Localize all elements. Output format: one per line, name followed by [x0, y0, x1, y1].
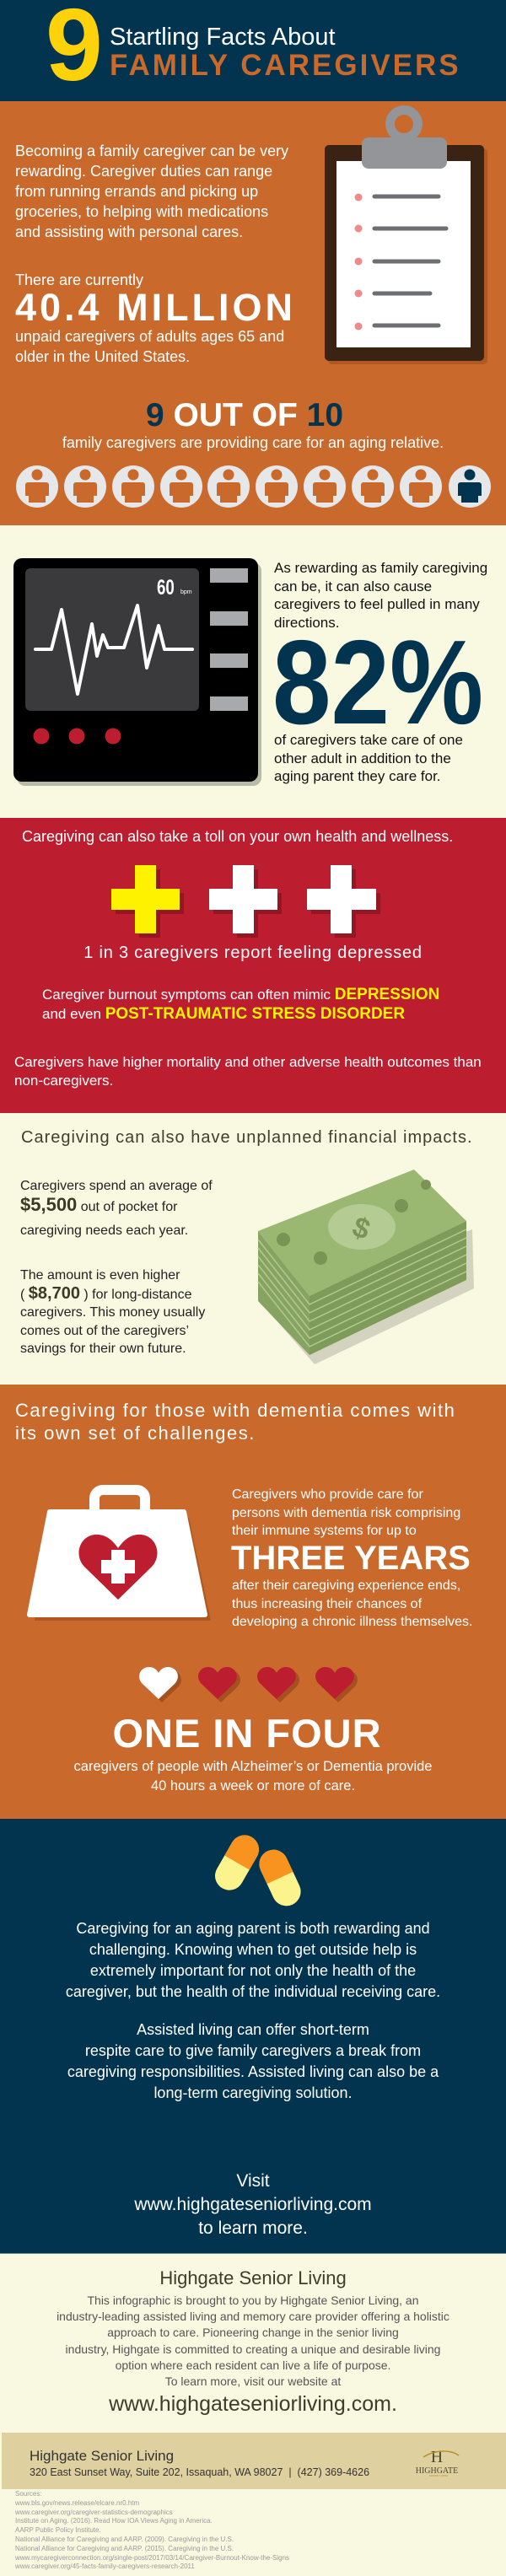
heading: dementia [15, 1400, 455, 1444]
text: three years [232, 1487, 460, 1538]
text: pulled in many directions: can be, it can also cause [274, 578, 432, 594]
text: aging relative: family caregivers are providing care for an aging relative. [62, 434, 444, 451]
text: visit website: to learn more. [198, 2218, 308, 2238]
text: sources: Sources: [15, 2490, 42, 2498]
text block: intro: and assisting with personal cares. [15, 223, 243, 240]
panel: health toll [0, 818, 506, 1113]
text: visit website [134, 2171, 372, 2238]
stat: one in four: ONE IN FOUR [112, 1711, 382, 1756]
text: $5,500 [20, 1179, 213, 1238]
text: after caregiving [232, 1578, 472, 1629]
text: about paragraph: approach to care. Pioneering change in the senior living [107, 2326, 399, 2339]
icon: Highgate logo: H [431, 2448, 443, 2466]
text: conclusion paragraph 2 [67, 2021, 439, 2101]
text: after caregiving: developing a chronic illness themselves. [232, 1615, 472, 1629]
icon: pills [215, 1835, 301, 1906]
text: 1 in 3 depressed: 1 in 3 caregivers report feeling depressed [83, 944, 423, 962]
text: about paragraph: industry, Highgate is committed to creating a unique and desirable living [66, 2342, 440, 2356]
text: one in four caption [74, 1759, 432, 1794]
stat: 40.4 million: unpaid caregivers of adults ages 65 and [15, 328, 284, 345]
text: about paragraph [57, 2294, 449, 2388]
text: $8,700 [20, 1268, 206, 1356]
text: three years: Caregivers who provide care for [232, 1487, 423, 1502]
text: pulled in many directions: directions. [274, 614, 339, 631]
text: conclusion paragraph 2: caregiving responsibilities. Assisted living can also be a [67, 2063, 439, 2080]
text: pulled in many directions: As rewarding as family caregiving [274, 560, 487, 576]
icon: medical bag [27, 1485, 211, 1621]
stat: three years: THREE YEARS [231, 1540, 471, 1577]
text: sources: Institute on Aging. (2016). Read How IOA Views Aging in America. [15, 2517, 213, 2525]
text: $5,500: $5,500 out of pocket for [20, 1194, 177, 1215]
text: after caregiving: thus increasing their chances of [232, 1597, 422, 1611]
icon row: 10 people [16, 465, 491, 508]
text block: intro: Becoming a family caregiver can be very [15, 143, 288, 159]
heading: financial: Caregiving can also have unplanned financial impacts. [21, 1128, 473, 1147]
text block: intro: from running errands and picking up [15, 183, 258, 200]
icon: Highgate logo: SENIOR LIVING [429, 2474, 449, 2477]
text: about paragraph: To learn more, visit our website at [165, 2374, 341, 2388]
text: $8,700: comes out of the caregivers’ [20, 1324, 189, 1337]
text: $5,500: Caregivers spend an average of [20, 1179, 213, 1193]
text: sources: www.bls.gov/news.release/elcare.nr0.htm [15, 2499, 139, 2507]
text: burnout [42, 986, 439, 1023]
text: about paragraph: industry-leading assisted living and memory care provider offering a holistic [57, 2310, 449, 2323]
text: conclusion paragraph 1: challenging. Knowing when to get outside help is [89, 1941, 417, 1958]
text block: intro: rewarding. Caregiver duties can range [15, 163, 272, 180]
text: footer name and address: Highgate Senior Living [30, 2448, 174, 2464]
panel: 82 percent [0, 525, 506, 818]
icon: hearts row [139, 1667, 358, 1702]
text: 82 caption: aging parent they care for. [274, 768, 441, 784]
text: conclusion paragraph 1 [66, 1920, 440, 2000]
text block: intro: groceries, to helping with medications [15, 203, 268, 220]
text: $5,500: caregiving needs each year. [20, 1223, 188, 1238]
title line 2: FAMILY CAREGIVERS [110, 49, 461, 82]
icon: money stack [258, 1170, 474, 1364]
stat: 40.4 million [15, 272, 296, 365]
panel: header [0, 0, 506, 101]
stat: 9 out of 10: 9 OUT OF 10 [146, 397, 343, 433]
heading: Highgate Senior Living: Highgate Senior Living [159, 2267, 347, 2288]
text: sources: www.mycaregiverconnection.org/single-post/2017/03/14/Caregiver-Burnout-Know-the-Signs [15, 2554, 289, 2562]
icon: heart monitor [13, 558, 261, 786]
text: after caregiving: after their caregiving experience ends, [232, 1578, 460, 1593]
text: sources: www.caregiver.org/caregiver-statistics-demographics [15, 2509, 173, 2516]
text: about paragraph: This infographic is brought to you by Highgate Senior Living, an [87, 2294, 418, 2307]
text: 82 caption: other adult in addition to the [274, 750, 451, 766]
panel: about Highgate [0, 2253, 506, 2433]
text: three years: their immune systems for up to [232, 1524, 417, 1538]
text: sources: National Alliance for Caregiving and AARP. (2009). Caregiving in the U.S. [15, 2536, 234, 2543]
icon: money stack: $ [348, 1211, 374, 1246]
stat: 40.4 million: There are currently [15, 272, 143, 288]
text: conclusion paragraph 2: long-term caregiving solution. [153, 2084, 353, 2101]
text: conclusion paragraph 1: caregiver, but the health of the individual receiving care. [66, 1983, 440, 2000]
title line 1: Startling Facts About [110, 24, 336, 51]
icon: clipboard [325, 105, 487, 364]
text: visit website: Visit [236, 2171, 270, 2191]
text: pulled in many directions [274, 560, 487, 631]
panel: intro orange [0, 101, 506, 525]
text: pulled in many directions: caregivers to feel pulled in many [274, 596, 480, 612]
text: footer name and address [30, 2448, 369, 2478]
stat: 82%: 82% [272, 616, 483, 750]
panel: dementia [0, 1385, 506, 1819]
icon: heart monitor: bpm [180, 589, 192, 595]
text: conclusion paragraph 2: respite care to give family caregivers a break from [85, 2042, 421, 2059]
panel: financial [0, 1113, 506, 1385]
heading: dementia: its own set of challenges. [15, 1422, 256, 1444]
icon: heart monitor: 60 [157, 575, 175, 600]
heading: dementia: Caregiving for those with dementia comes with [15, 1400, 455, 1421]
text: website url: www.highgateseniorliving.com. [109, 2392, 397, 2416]
panel: footer contact [2, 2433, 506, 2489]
text: three years: persons with dementia risk comprising [232, 1506, 460, 1519]
text: footer name and address: 320 East Sunset Way, Suite 202, Issaquah, WA 98027 | (427) 369-4626 [30, 2466, 369, 2478]
text: burnout: and even POST-TRAUMATIC STRESS DISORDER [42, 1005, 405, 1023]
text: mortality [14, 1054, 482, 1089]
text: sources: National Alliance for Caregiving and AARP. (2015). Caregiving in the U.S. [15, 2545, 234, 2552]
text: conclusion paragraph 2: Assisted living can offer short-term [137, 2021, 369, 2038]
text: 82 caption [274, 732, 463, 784]
icon: three crosses [111, 865, 380, 938]
text block: intro [15, 143, 288, 240]
text: conclusion paragraph 1: Caregiving for an aging parent is both rewarding and [76, 1920, 430, 1937]
text: $8,700: ( $8,700 ) for long-distance [20, 1283, 191, 1302]
text: mortality: Caregivers have higher mortality and other adverse health outcomes than [14, 1054, 482, 1070]
text: $8,700: The amount is even higher [20, 1268, 180, 1283]
text: sources: www.caregiver.org/45-facts-family-caregivers-research-2011 [15, 2563, 195, 2570]
text: conclusion paragraph 1: extremely important for not only the health of the [90, 1962, 416, 1979]
text: burnout: Caregiver burnout symptoms can often mimic DEPRESSION [42, 986, 439, 1003]
text: visit website: www.highgateseniorliving.com [134, 2195, 372, 2214]
text: one in four caption: 40 hours a week or more of care. [151, 1778, 355, 1794]
text: one in four caption: caregivers of people with Alzheimer’s or Dementia provide [74, 1759, 432, 1774]
text: sources: AARP Public Policy Institute. [15, 2526, 101, 2534]
heading: health toll: Caregiving can also take a toll on your own health and wellness. [22, 828, 453, 845]
icon: Highgate logo: HIGHGATE [416, 2466, 458, 2476]
text: $8,700: caregivers. This money usually [20, 1305, 205, 1320]
text: 82 caption: of caregivers take care of one [274, 732, 463, 748]
stat: 40.4 million: older in the United States. [15, 348, 190, 365]
text: about paragraph: option where each resident can live a life of purpose. [116, 2358, 390, 2372]
stat: 40.4 million: 40.4 MILLION [15, 286, 296, 329]
text: $8,700: savings for their own future. [20, 1342, 186, 1356]
icon: Highgate logo [416, 2448, 459, 2477]
text: sources [15, 2490, 289, 2570]
text: mortality: non-caregivers. [14, 1073, 113, 1089]
panel: conclusion navy [0, 1819, 506, 2253]
